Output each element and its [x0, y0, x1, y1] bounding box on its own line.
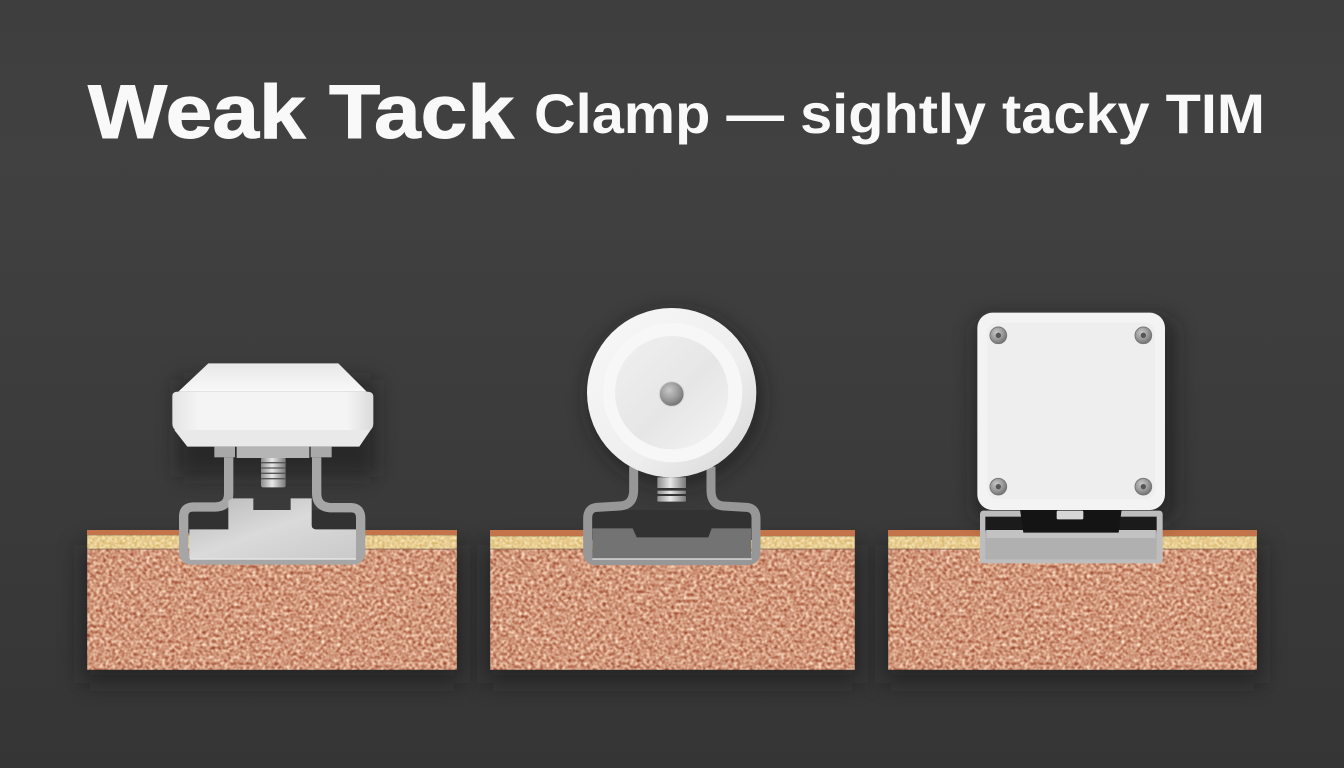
- white housing 1: [172, 363, 373, 447]
- panel: clamp top view: [883, 313, 1262, 683]
- substrate block 2: [485, 530, 860, 683]
- mounting plates 1: [214, 447, 332, 458]
- substrate block 3: [883, 530, 1262, 683]
- panel: clamp side view: [82, 363, 462, 683]
- screw 1: [261, 457, 286, 487]
- title: clamp subtitle: Clamp — sightly tacky TIM: [534, 82, 1265, 145]
- round housing: [587, 308, 756, 477]
- clip 1: [184, 457, 361, 560]
- title: [88, 70, 1265, 155]
- substrate block 1: [82, 530, 462, 683]
- device 2: [587, 308, 763, 561]
- clip 2: [588, 467, 756, 561]
- panel: clamp front view: [485, 308, 860, 683]
- clip 3: [980, 509, 1163, 563]
- title: weak tack: Weak Tack: [88, 70, 515, 155]
- square housing: [977, 313, 1165, 510]
- device 1: [172, 363, 377, 560]
- screw 2: [657, 477, 686, 502]
- corner screws: [990, 327, 1152, 495]
- device 3: [973, 313, 1177, 563]
